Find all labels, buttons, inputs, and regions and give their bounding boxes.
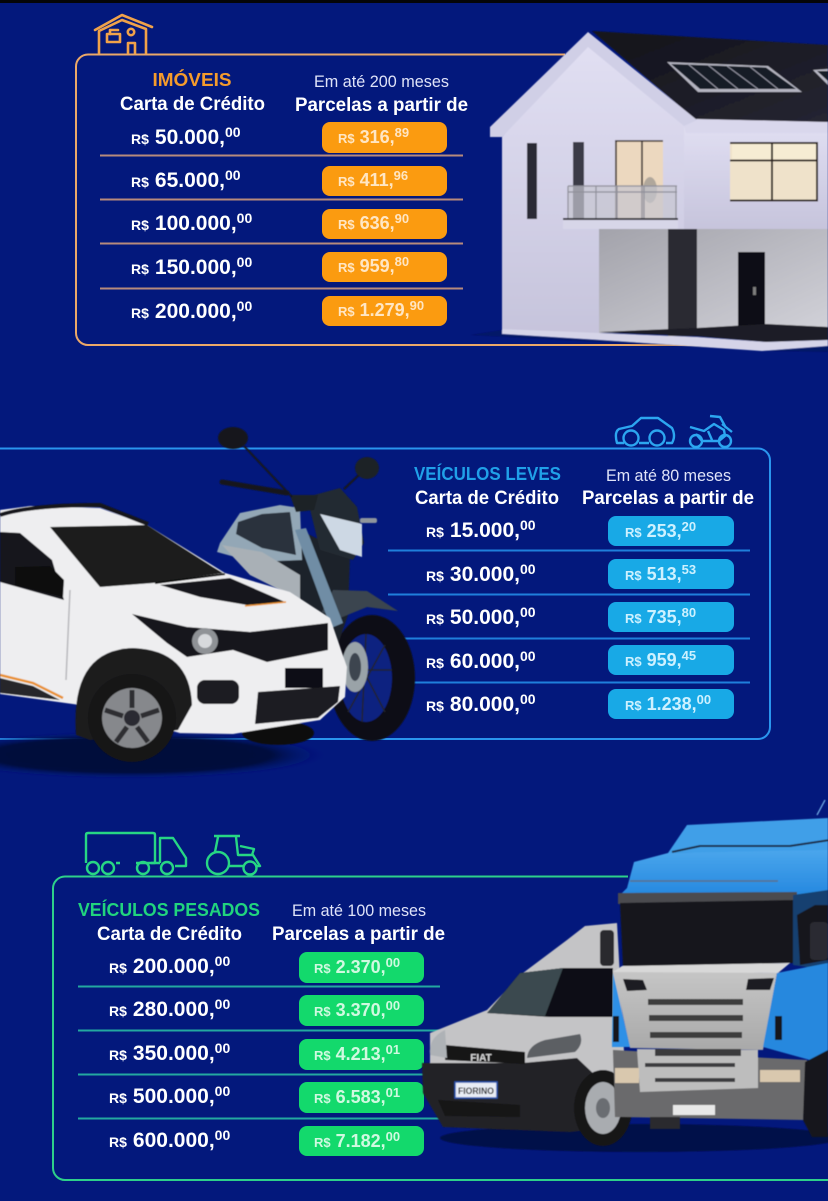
illustration: truck [612, 800, 828, 1137]
price pills: veículos leves: R$ 1.238, [625, 694, 697, 714]
credit values: imóveis: 00 [225, 167, 241, 183]
term: 100 meses: Em até 100 meses [292, 902, 426, 920]
credit values: veículos pesados: 00 [215, 1127, 230, 1143]
price pills: imóveis: 90 [395, 211, 409, 226]
price pills: veículos leves: 00 [697, 692, 711, 707]
credit values: veículos pesados [109, 953, 230, 1152]
title: veículos pesados: VEÍCULOS PESADOS [78, 899, 260, 920]
credit values: imóveis: 00 [237, 210, 252, 226]
panel: veículos pesados [53, 833, 828, 1180]
price pills: veículos pesados: 00 [386, 1129, 400, 1144]
column heading: parcelas: Parcelas a partir de [582, 488, 754, 509]
title: veículos leves: VEÍCULOS LEVES [414, 463, 561, 484]
price pills: veículos pesados: R$ 6.583, [314, 1087, 386, 1107]
credit values: imóveis: 00 [237, 298, 252, 314]
van badge: FIAT [470, 1053, 492, 1064]
price pills: veículos leves: R$ 735, [625, 607, 682, 627]
price pills: veículos leves: R$ 959, [625, 650, 682, 670]
illustration: house [470, 31, 828, 352]
credit values: imóveis: R$ 150.000, [131, 256, 237, 279]
price pills: veículos pesados: 01 [386, 1042, 400, 1057]
credit values: imóveis: R$ 200.000, [131, 300, 237, 323]
title: imóveis: IMÓVEIS [152, 69, 232, 90]
price pills: veículos leves: 20 [682, 519, 696, 534]
credit values: veículos leves: 00 [520, 561, 536, 577]
credit values: veículos pesados: 00 [215, 1040, 230, 1056]
panel: imóveis [76, 15, 700, 345]
price pills: imóveis: 89 [395, 125, 409, 140]
term: 200 meses: Em até 200 meses [314, 73, 449, 91]
credit values: imóveis: R$ 50.000, [131, 126, 225, 149]
credit values: imóveis [131, 124, 252, 323]
price pills: veículos pesados: 01 [386, 1085, 400, 1100]
term: 80 meses: Em até 80 meses [606, 467, 731, 485]
credit values: imóveis: R$ 65.000, [131, 169, 225, 192]
price pills: veículos leves: R$ 513, [625, 564, 682, 584]
illustration: van [422, 923, 828, 1152]
credit values: veículos pesados: 00 [215, 996, 230, 1012]
credit values: veículos pesados: 00 [215, 953, 230, 969]
credit values: veículos pesados: R$ 500.000, [109, 1085, 215, 1108]
price pills: imóveis: 90 [410, 298, 424, 313]
panel outline: veículos pesados [53, 876, 828, 1180]
price pills: veículos pesados: R$ 4.213, [314, 1044, 386, 1064]
icon: motorcycle [690, 416, 732, 447]
panel outline: imóveis [76, 54, 700, 345]
panel outline: veículos leves [0, 448, 770, 739]
credit values: veículos leves: 00 [520, 648, 536, 664]
credit values: imóveis: 00 [225, 124, 241, 140]
icon: car [616, 418, 674, 446]
price pills: veículos leves: 45 [682, 648, 696, 663]
credit values: veículos leves: R$ 80.000, [426, 693, 520, 716]
price pills: veículos leves [608, 516, 734, 719]
column heading: carta de crédito: Carta de Crédito [415, 488, 559, 509]
price pills: imóveis [322, 122, 447, 326]
price pills: veículos pesados: R$ 7.182, [314, 1131, 386, 1151]
column heading: parcelas: Parcelas a partir de [272, 924, 445, 945]
van plate: FIORINO [458, 1086, 494, 1097]
column heading: parcelas: Parcelas a partir de [295, 95, 468, 116]
price pills: veículos pesados: R$ 3.370, [314, 1000, 386, 1020]
panel: veículos leves [0, 416, 770, 739]
credit values: veículos pesados: R$ 280.000, [109, 998, 215, 1021]
price pills: imóveis: R$ 959, [338, 256, 395, 276]
credit values: veículos pesados: R$ 200.000, [109, 955, 215, 978]
credit values: veículos leves: R$ 15.000, [426, 519, 520, 542]
price pills: imóveis: R$ 636, [338, 213, 395, 233]
price pills: veículos pesados: 00 [386, 955, 400, 970]
price pills: imóveis: 96 [394, 168, 408, 183]
credit values: veículos leves: R$ 30.000, [426, 563, 520, 586]
price pills: veículos leves: 53 [682, 562, 696, 577]
price pills: veículos pesados: 00 [386, 998, 400, 1013]
credit values: veículos pesados: R$ 350.000, [109, 1042, 215, 1065]
price pills: veículos pesados [299, 952, 424, 1156]
credit values: veículos leves [426, 517, 536, 716]
credit values: imóveis: R$ 100.000, [131, 212, 237, 235]
credit values: veículos leves: 00 [520, 604, 536, 620]
column heading: carta de crédito: Carta de Crédito [120, 94, 265, 115]
price pills: imóveis: 80 [395, 254, 409, 269]
icon: truck [86, 833, 186, 874]
credit values: veículos leves: 00 [520, 517, 536, 533]
price pills: veículos pesados: R$ 2.370, [314, 957, 386, 977]
price pills: imóveis: R$ 1.279, [338, 300, 410, 320]
credit values: veículos pesados: R$ 600.000, [109, 1129, 215, 1152]
icon: tractor [207, 836, 260, 874]
column heading: carta de crédito: Carta de Crédito [97, 924, 242, 945]
illustration: motorcycle [217, 427, 415, 741]
credit values: veículos leves: 00 [520, 691, 536, 707]
credit values: imóveis: 00 [237, 254, 252, 270]
price pills: veículos leves: 80 [682, 605, 696, 620]
credit values: veículos pesados: 00 [215, 1083, 230, 1099]
icon: house [95, 15, 152, 53]
credit values: veículos leves: R$ 50.000, [426, 606, 520, 629]
top black edge [0, 0, 828, 3]
price pills: imóveis: R$ 316, [338, 127, 395, 147]
price pills: imóveis: R$ 411, [338, 170, 394, 190]
illustration: car [0, 505, 347, 779]
price pills: veículos leves: R$ 253, [625, 521, 682, 541]
credit values: veículos leves: R$ 60.000, [426, 650, 520, 673]
